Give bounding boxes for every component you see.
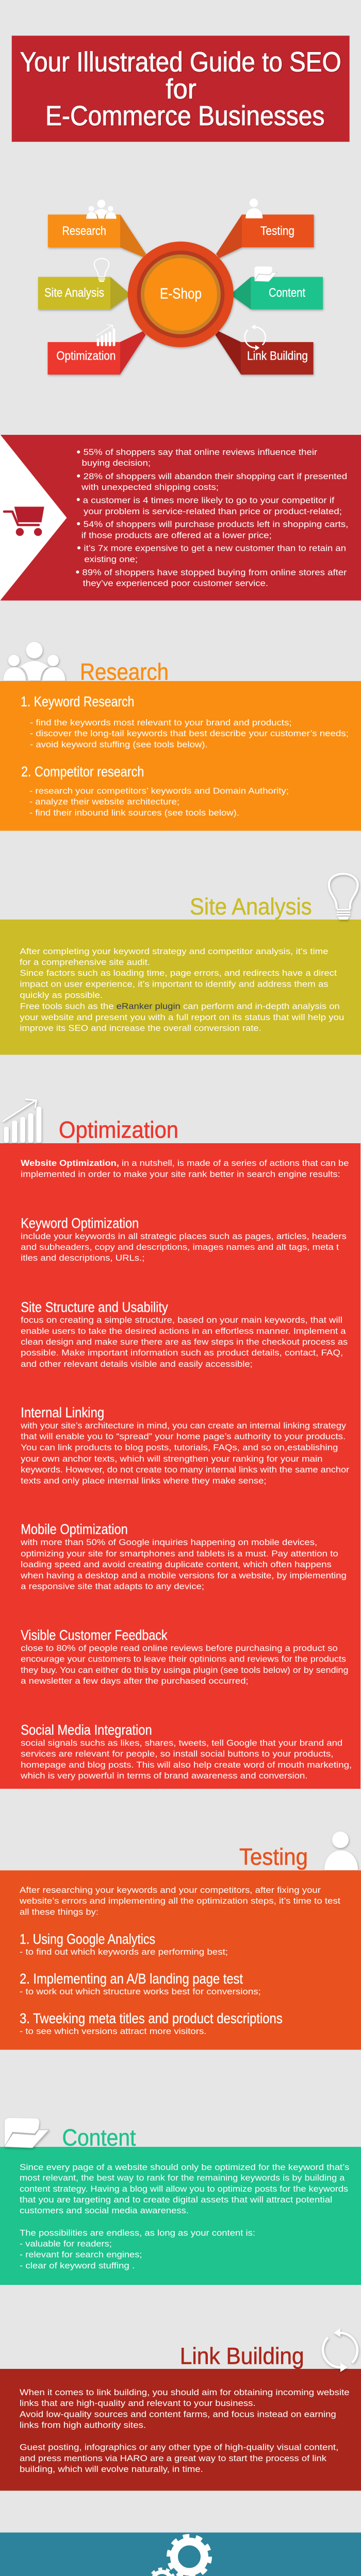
icon: person xyxy=(324,1832,358,1870)
panel: optimization body: with more than 50% of Google inquiries happening on mobile devices, xyxy=(20,1537,317,1547)
icon: growth chart xyxy=(3,1099,41,1143)
tab: Site Analysis: Site Analysis xyxy=(44,286,104,300)
panel: E-Commerce SEO Tools xyxy=(0,2533,361,2576)
panel: content body: customers and social media awareness. xyxy=(20,2206,189,2215)
panel: optimization body: close to 80% of people read online reviews before purchasing a product so xyxy=(21,1643,338,1653)
panel: link building body xyxy=(0,2369,361,2490)
bullet list: your problem is service-related than price or product-related; xyxy=(84,506,342,516)
panel: optimization body: encourage your customers to leave their optinions and reviews for the products xyxy=(21,1654,346,1664)
bullet list: 28% of shoppers will abandon their shopping cart if presented xyxy=(84,471,347,481)
panel: testing body: - to work out which structure works best for conversions; xyxy=(20,1987,261,1996)
hub circle: E-Shop: E-Shop xyxy=(160,285,202,302)
heading: Site Analysis: Site Analysis xyxy=(190,893,312,920)
panel: optimization body: a newsletter a few days after the purchased occurred; xyxy=(21,1676,249,1686)
bullet list: they’ve experienced poor customer service. xyxy=(83,578,268,588)
panel: link building body: Guest posting, infographics or any other type of high-quality visual content, xyxy=(20,2442,338,2452)
panel: testing body: website’s errors and implementing all the optimization steps, it’s time to test xyxy=(19,1896,340,1906)
bullet list: 54% of shoppers will purchase products left in shopping carts, xyxy=(84,519,348,529)
panel: testing body: 2. Implementing an A/B landing page test xyxy=(20,1971,243,1987)
icon: small people xyxy=(86,200,117,219)
panel: optimization body: Keyword Optimization xyxy=(21,1215,139,1231)
panel: testing body: - to see which versions attract more visitors. xyxy=(20,2026,206,2036)
section: Site Analysis xyxy=(0,874,361,1055)
panel: content body: - valuable for readers; xyxy=(20,2239,112,2248)
icon: small growth chart xyxy=(96,325,115,346)
title banner xyxy=(11,36,350,142)
panel: testing body xyxy=(0,1870,361,2050)
panel: content body: Since every page of a website should only be optimized for the keyword that’s xyxy=(20,2162,349,2172)
section: Content xyxy=(0,2118,361,2285)
panel: optimization body xyxy=(0,1143,360,1789)
panel: optimization body: possible. Make important information such as product details, contact, FAQ, xyxy=(21,1348,343,1358)
panel: site analysis body: Free tools such as the eRanker plugin can perform and in-depth analysis on xyxy=(20,1002,340,1011)
tab: Research: Research xyxy=(62,224,106,238)
bullet list: a customer is 4 times more likely to go to your competitor if xyxy=(83,495,334,505)
panel: optimization body: Mobile Optimization xyxy=(21,1521,128,1537)
icon: people xyxy=(4,642,65,681)
panel: site analysis body: Since factors such as loading time, page errors, and redirects have a direct xyxy=(20,968,337,978)
panel: research body: - avoid keyword stuffing (see tools below). xyxy=(30,739,208,749)
panel: optimization body: and other relevant details visible and easily accessible; xyxy=(21,1359,253,1369)
panel: testing body: After researching your keywords and your competitors, after fixing your xyxy=(20,1885,321,1895)
panel: optimization body: implemented in order to make your site rank better in search engine results: xyxy=(21,1169,340,1179)
panel: optimization body: that will enable you to “spread” your home page’s authority to your products. xyxy=(21,1432,346,1442)
panel: content body: - relevant for search engines; xyxy=(20,2250,142,2260)
title banner: for xyxy=(166,74,196,105)
tab: Testing: Testing xyxy=(260,224,294,238)
section: Link Building xyxy=(0,2328,361,2490)
hub circle: E-Shop xyxy=(128,242,234,347)
panel: link building body: When it comes to link building, you should aim for obtaining incoming website xyxy=(20,2387,350,2397)
panel: link building body: links from high authority sites. xyxy=(20,2420,146,2430)
panel: content body: that you are targeting and to create digital assets that will attract potential xyxy=(20,2195,332,2205)
bullet list: if those products are offered at a lower price; xyxy=(81,531,272,540)
panel: optimization body: loading speed and avoid creating duplicate content, which often happens xyxy=(21,1560,332,1569)
panel: research body: - find their inbound link sources (see tools below). xyxy=(29,808,239,818)
panel: optimization body: texts and only place internal links where they make sense; xyxy=(21,1476,266,1486)
bullet list: with unexpected shipping costs; xyxy=(81,482,219,492)
icon: light bulb xyxy=(329,874,358,920)
bullet list: it’s 7x more expensive to get a new customer than to retain an xyxy=(84,544,346,553)
panel: research body: - find the keywords most relevant to your brand and products; xyxy=(30,718,292,727)
icon: shopping cart xyxy=(4,507,44,536)
tab: Optimization xyxy=(47,331,146,375)
panel: content body: most relevant, the best way to rank for the remaining keywords is by building a xyxy=(20,2173,345,2183)
panel: research body: 1. Keyword Research xyxy=(21,693,134,709)
panel: optimization body: itles and descriptions, URLs.; xyxy=(21,1253,144,1263)
panel: link building body: building, which will evolve naturally, in time. xyxy=(20,2464,203,2474)
panel: optimization body: they buy. You can either do this by usinga plugin (see tools below) or by sending xyxy=(21,1665,348,1675)
panel: testing body: 1. Using Google Analytics xyxy=(20,1931,155,1947)
panel: content body: - clear of keyword stuffing . xyxy=(20,2261,135,2270)
icon: small cycle arrows xyxy=(245,324,266,350)
panel: research body: - analyze their website architecture; xyxy=(29,797,179,807)
panel: site analysis body xyxy=(0,920,361,1055)
bullet list: 55% of shoppers say that online reviews influence their xyxy=(84,447,318,457)
tab: Testing xyxy=(216,214,314,258)
panel: optimization body: Visible Customer Feedback xyxy=(21,1627,168,1643)
section: Testing xyxy=(0,1832,361,2050)
bullet list: existing one; xyxy=(84,554,138,564)
panel: site analysis body: improve its SEO and increase the overall conversion rate. xyxy=(20,1023,261,1033)
panel: optimization body: your own anchor texts, which will strengthen your ranking for your main xyxy=(21,1454,322,1464)
panel: testing body: all these things by: xyxy=(20,1907,99,1917)
icon: small folder xyxy=(254,266,277,282)
panel: site analysis body: your website and present you with a full report on its status that will help you xyxy=(20,1012,344,1022)
panel: optimization body: homepage and blog posts. This will also help create word of mouth marketing, xyxy=(21,1760,352,1770)
panel: optimization body: a responsive site that adapts to any device; xyxy=(21,1581,204,1591)
panel: optimization body: Site Structure and Usability xyxy=(21,1299,168,1315)
tab: Link Building xyxy=(215,331,314,375)
tab: Site Analysis xyxy=(38,277,128,309)
panel: testing body: - to find out which keywords are performing best; xyxy=(20,1947,228,1957)
panel: link building body: links that are high-quality and relevant to your business. xyxy=(20,2398,256,2408)
icon: gears xyxy=(150,2536,210,2576)
panel: optimization body: Website Optimization, in a nutshell, is made of a series of actions that can be xyxy=(21,1158,349,1168)
panel: optimization body: with your site’s architecture in mind, you can create an internal linking strategy xyxy=(20,1420,347,1430)
panel: site analysis body: impact on user experience, it’s important to identify and address them as xyxy=(20,979,329,989)
panel: optimization body: optimizing your site for smartphones and tablets is a must. Pay attention to xyxy=(21,1549,338,1558)
tab: Research xyxy=(48,214,146,257)
panel: link building body: and press mentions via HARO are a great way to start the process of link xyxy=(20,2453,327,2463)
panel: shopper statistics xyxy=(0,434,361,601)
bullet list xyxy=(76,447,348,588)
panel: site analysis body: for a comprehensive site audit. xyxy=(20,957,150,967)
title banner: E-Commerce Businesses xyxy=(45,100,325,131)
panel: optimization body: enable users to take the desired actions in an effortless manner. Implement a xyxy=(21,1326,346,1336)
icon: folder xyxy=(4,2118,49,2148)
panel: research body: - research your competitors’ keywords and Domain Authority; xyxy=(29,786,289,796)
panel: content body: The possibilities are endless, as long as your content is: xyxy=(20,2228,255,2238)
panel: content body: content strategy. Having a blog will allow you to optimize posts for the keywords xyxy=(20,2184,348,2194)
panel: optimization body: focus on creating a simple structure, based on your main keywords, that will xyxy=(21,1315,342,1325)
panel: link building body: Avoid low-quality sources and content farms, and focus instead on earning xyxy=(20,2409,336,2419)
panel: optimization body: keywords. However, do not create too many internal links with the same anchor xyxy=(21,1465,350,1475)
panel: optimization body: when having a desktop and a mobile versions for a website, by implementing xyxy=(20,1570,347,1580)
tab: Optimization: Optimization xyxy=(56,349,116,363)
panel: optimization body: Social Media Integration xyxy=(21,1722,152,1738)
heading: Testing: Testing xyxy=(239,1844,308,1870)
heading: Link Building: Link Building xyxy=(180,2343,304,2369)
panel: content body xyxy=(0,2147,361,2285)
bullet list: 89% of shoppers have stopped buying from online stores after xyxy=(82,568,347,577)
panel: research body: - discover the long-tail keywords that best describe your customer’s needs; xyxy=(30,728,349,738)
panel: optimization body: Internal Linking xyxy=(21,1404,104,1420)
panel: optimization body: include your keywords in all strategic places such as pages, articles, headers xyxy=(21,1231,347,1241)
panel: optimization body: which is very powerful in terms of brand awareness and conversion. xyxy=(20,1771,308,1781)
tab: Content xyxy=(233,277,323,309)
section: Research xyxy=(0,642,361,831)
panel: optimization body: clean design and make sure there are as few steps in the checkout process as xyxy=(21,1337,348,1347)
panel: optimization body: social signals suchs as likes, shares, tweets, tell Google that your brand and xyxy=(21,1738,342,1748)
panel: optimization body: and subheaders, copy and descriptions, images names and alt tags, meta t xyxy=(21,1242,339,1252)
heading: Optimization: Optimization xyxy=(59,1117,178,1143)
section: Optimization xyxy=(0,1099,360,1789)
heading: Research: Research xyxy=(80,659,169,685)
tab: Content: Content xyxy=(269,286,305,300)
panel: optimization body: services are relevant for people, so install social buttons to your products, xyxy=(21,1749,333,1758)
panel: research body: 2. Competitor research xyxy=(21,764,144,779)
panel: research body xyxy=(0,681,361,831)
panel: optimization body: You can link products to blog posts, tutorials, FAQs, and so on,establishing xyxy=(21,1443,338,1452)
icon: small light bulb xyxy=(94,259,109,282)
bullet list: buying decision; xyxy=(81,458,151,468)
hub diagram xyxy=(38,199,323,375)
tab: Link Building: Link Building xyxy=(247,349,308,363)
panel: site analysis body: After completing your keyword strategy and competitor analysis, it’s time xyxy=(20,946,329,956)
icon: cycle arrows xyxy=(323,2328,357,2372)
panel: testing body: 3. Tweeking meta titles and product descriptions xyxy=(20,2010,283,2026)
icon: small person xyxy=(245,199,262,218)
panel: site analysis body: quickly as possible. xyxy=(20,990,103,1000)
heading: Content: Content xyxy=(62,2124,136,2150)
